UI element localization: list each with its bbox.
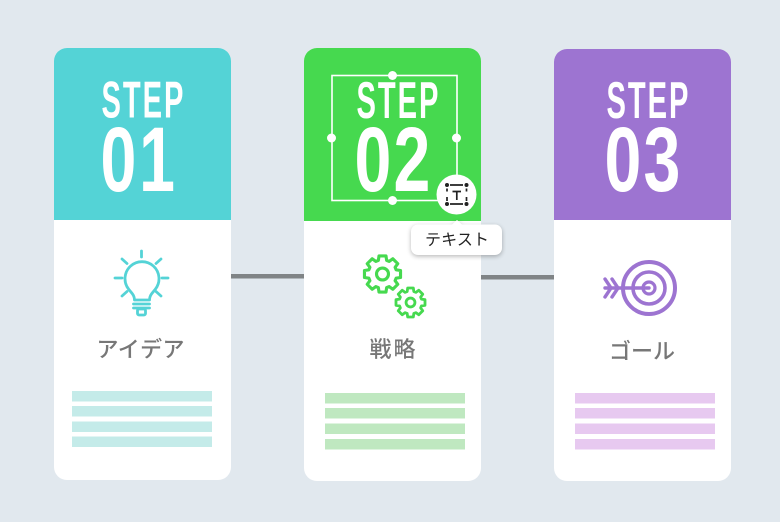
panel: step 2 — [304, 48, 502, 481]
header: step 3 — [554, 49, 731, 220]
heading: STEP 03: STEP — [606, 71, 690, 129]
text placeholder lines — [325, 393, 465, 450]
label: strategy: 戦略 — [370, 337, 416, 362]
panel: step 1 — [54, 48, 231, 480]
text placeholder lines — [72, 391, 212, 447]
heading: STEP 01: 01 — [100, 108, 178, 211]
connector: step 2 to step 3 — [480, 275, 555, 280]
icon: gears — [364, 256, 425, 317]
icon: target with arrow — [605, 262, 675, 314]
text placeholder lines — [575, 393, 715, 450]
heading: STEP 02: 02 — [354, 107, 432, 211]
header: step 1 — [54, 48, 231, 220]
tooltip — [411, 220, 502, 256]
label: idea: アイデア — [96, 337, 184, 362]
heading: STEP 02 — [354, 71, 440, 211]
panel: step 3 — [554, 49, 731, 481]
heading: STEP 02: STEP — [356, 71, 440, 129]
heading: STEP 03 — [604, 71, 690, 211]
heading: STEP 01 — [100, 71, 185, 211]
heading: STEP 01: STEP — [102, 71, 185, 129]
connector: step 1 to step 2 — [230, 274, 305, 278]
tooltip: テキスト — [425, 232, 489, 249]
selection frame — [327, 71, 461, 205]
heading: STEP 03: 03 — [604, 107, 682, 211]
label: goal: ゴール — [609, 339, 675, 364]
icon: text tool button — [436, 174, 476, 214]
icon: light bulb — [115, 251, 168, 315]
header: step 2 — [304, 48, 481, 221]
